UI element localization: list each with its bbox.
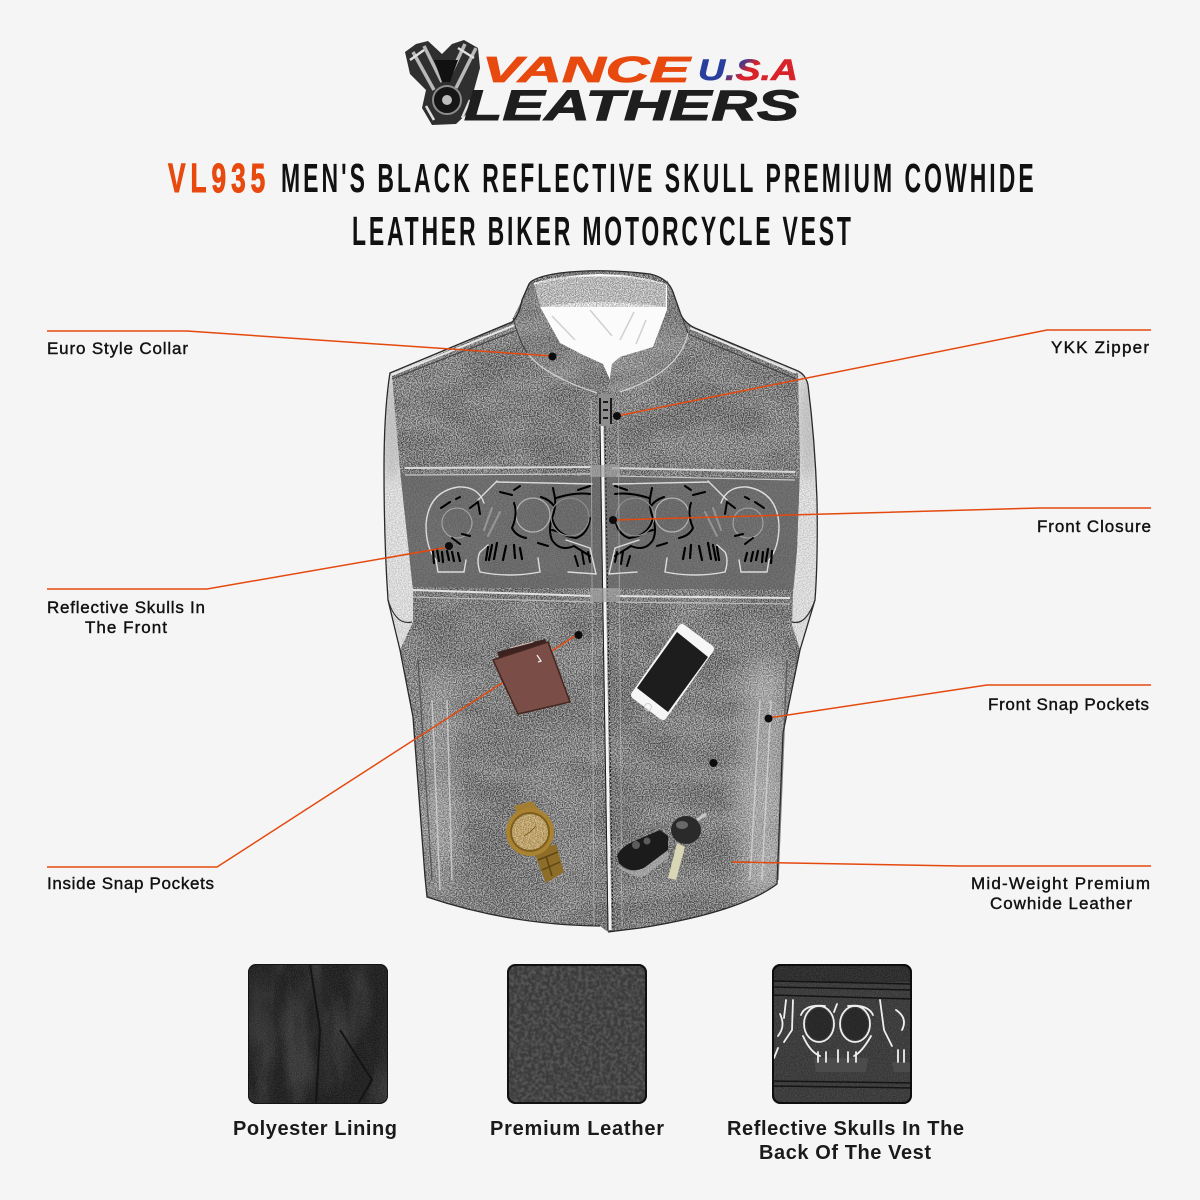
leader line: Inside Snap Pockets (47, 634, 578, 867)
label: Front Snap Pockets: Front Snap Pockets (988, 695, 1149, 714)
label: Inside Snap Pockets: Inside Snap Pockets (47, 874, 214, 893)
marker dots (445, 352, 772, 767)
label: Reflective Skulls In The Front: Reflective Skulls In (47, 598, 205, 617)
leader line: Front Closure (612, 508, 1151, 520)
title code: VL935: VL935 (168, 156, 265, 202)
icon: phone (635, 628, 710, 716)
label: Mid-Weight Premium Cowhide Leather (971, 874, 1150, 913)
leader lines and dots (47, 330, 1151, 866)
collar top lining texture (534, 276, 666, 344)
leader line: Cowhide Leather (732, 862, 1151, 866)
title line 2: LEATHER BIKER MOTORCYCLE VEST (352, 209, 851, 255)
panel: polyester lining swatch (248, 964, 388, 1104)
label: Reflective Skulls In The Front: The Front (85, 618, 167, 637)
leader line: Front Snap Pockets (768, 685, 1151, 718)
label: Mid-Weight Premium Cowhide Leather: Mid-Weight Premium (971, 874, 1150, 893)
collar inner lining (533, 274, 667, 380)
panel: reflective skulls swatch (772, 964, 912, 1104)
caption: Premium Leather: Premium Leather (490, 1118, 664, 1140)
lighter hem shading (739, 660, 791, 920)
logo word: USA: U.S.A (698, 54, 798, 87)
zipper (590, 394, 622, 930)
skull band (400, 474, 800, 590)
icon: wallet (493, 639, 570, 714)
title (168, 156, 1034, 255)
leader line: Reflective Skulls (47, 547, 449, 589)
caption: Reflective Skulls In The Back Of The Vest: Reflective Skulls In The (727, 1118, 964, 1140)
skull embossing left and right (426, 481, 779, 575)
icon: V-twin engine (405, 40, 480, 125)
vest side gussets (384, 336, 816, 926)
logo word: Leathers: LEATHERS (464, 82, 799, 130)
leader line: YKK Zipper (617, 330, 1151, 416)
label: Front Closure: Front Closure (1037, 517, 1151, 536)
label: Mid-Weight Premium Cowhide Leather: Cowhide Leather (990, 894, 1132, 913)
swatch skulls (774, 1000, 904, 1062)
icon: gold watch (506, 801, 564, 883)
label: Euro Style Collar: Euro Style Collar (47, 339, 188, 358)
caption: Reflective Skulls In The Back Of The Vest: Back Of The Vest (759, 1142, 931, 1164)
leader line: Euro Style Collar (47, 331, 552, 356)
caption: Polyester Lining: Polyester Lining (233, 1118, 397, 1140)
vest body (380, 265, 820, 935)
swatch seams (772, 981, 912, 1088)
logo word: Vance: VANCE (482, 49, 692, 90)
icon: car keys (617, 814, 706, 880)
vest seams and outline (384, 271, 817, 932)
label: Reflective Skulls In The Front (47, 598, 205, 637)
logo: Vance Leathers USA (405, 40, 799, 130)
collar outer flaps (513, 280, 688, 394)
vest illustration (380, 265, 820, 935)
title line 1: MEN'S BLACK REFLECTIVE SKULL PREMIUM COWHIDE (281, 156, 1034, 202)
label: YKK Zipper: YKK Zipper (1051, 338, 1149, 357)
panel: premium leather swatch (507, 964, 647, 1104)
caption: Reflective Skulls In The Back Of The Vest (727, 1118, 964, 1164)
